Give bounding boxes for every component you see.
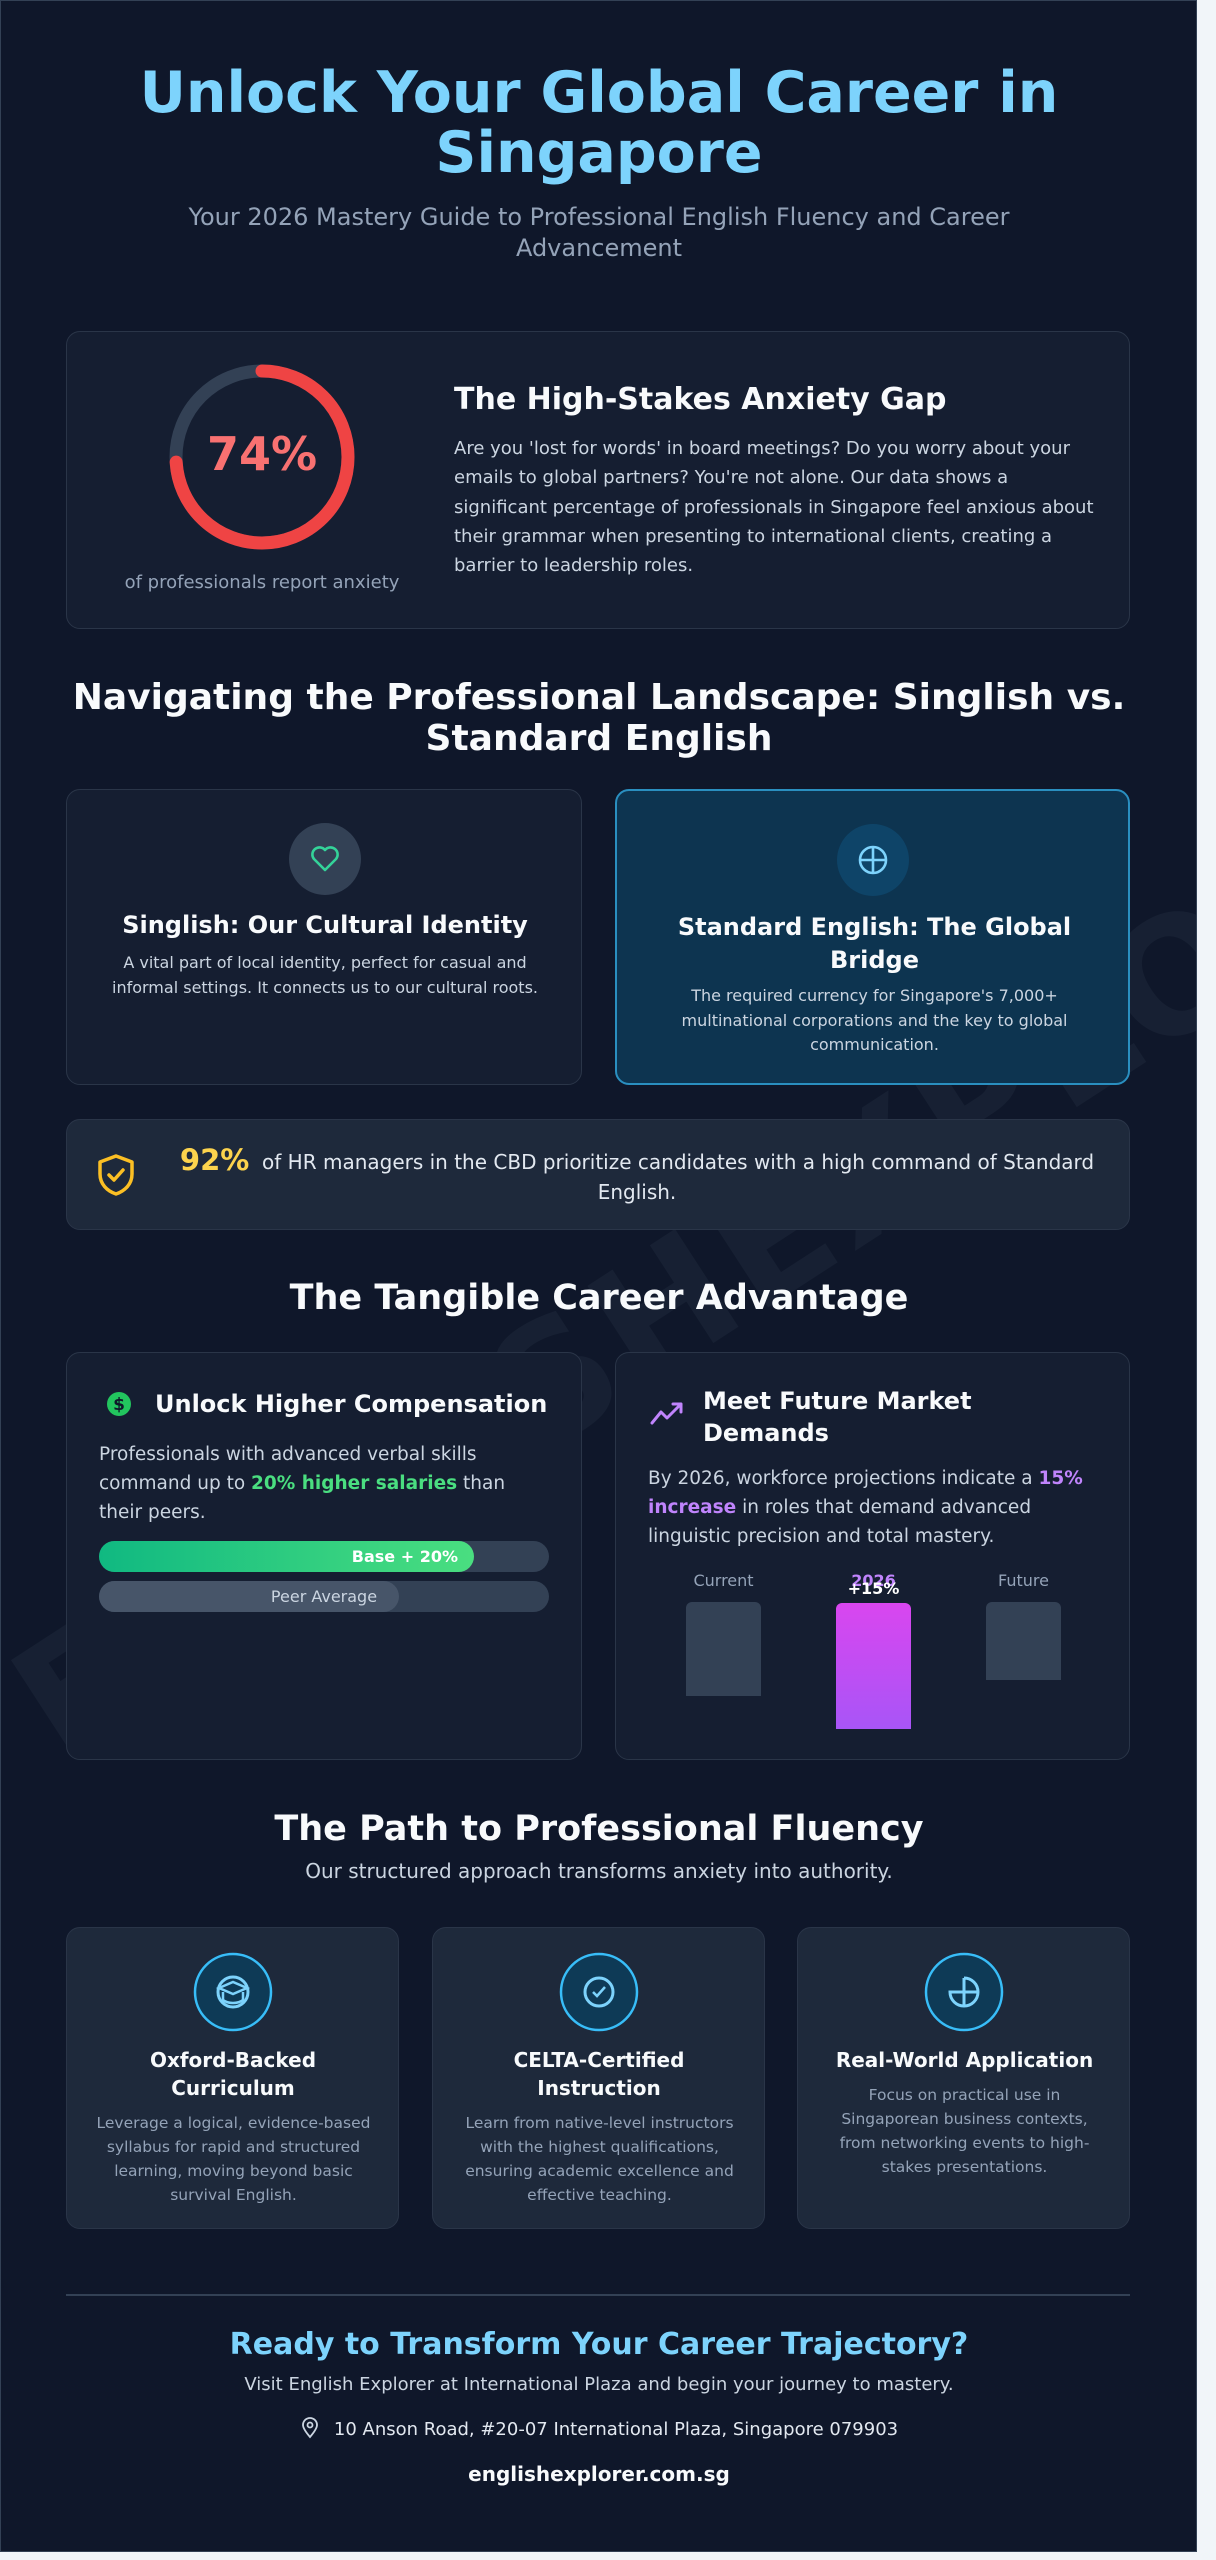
address: 10 Anson Road, #20-07 International Plaza, Singapore 079903 — [334, 2419, 898, 2440]
icon: badge — [560, 1952, 638, 2032]
panel: Singlish — [66, 789, 582, 1085]
heading: Oxford-Backed Curriculum — [150, 2048, 316, 2100]
donut chart 74% — [170, 364, 354, 550]
text: A vital part of local identity, perfect for casual and informal settings. It connects us to our cultural roots. — [112, 953, 538, 997]
panel: CELTA — [432, 1927, 765, 2229]
heading: Unlock Higher Compensation — [155, 1390, 547, 1418]
panel: market demands — [615, 1352, 1130, 1760]
heading: The High-Stakes Anxiety Gap — [454, 382, 947, 417]
website: englishexplorer.com.sg — [468, 2462, 730, 2486]
bar chart: projections — [686, 1571, 1061, 1729]
bar chart: projections: +15% — [848, 1579, 899, 1598]
text: Leverage a logical, evidence-based syllabus for rapid and structured learning, moving beyond basic survival English. — [96, 2114, 370, 2204]
section heading: path: The Path to Professional Fluency — [274, 1809, 924, 1849]
bar chart: projections: Current — [693, 1571, 754, 1590]
icon: trend — [650, 1402, 683, 1425]
text: By 2026, workforce projections indicate a 15% increase in roles that demand advanced linguistic precision and total mastery. — [648, 1468, 1083, 1547]
text: The required currency for Singapore's 7,000+ multinational corporations and the key to global communication. — [682, 986, 1067, 1054]
section heading: landscape: Navigating the Professional Landscape: Singlish vs. Standard English — [73, 677, 1125, 759]
stat text: 92% of HR managers in the CBD prioritize candidates with a high command of Standard English. — [180, 1143, 1094, 1204]
text: Professionals with advanced verbal skills command up to 20% higher salaries than their peers. — [99, 1444, 505, 1523]
text: Learn from native-level instructors with the highest qualifications, ensuring academic excellence and effective teaching. — [465, 2114, 734, 2204]
heading: Real-World Application — [836, 2048, 1093, 2072]
bar chart: projections: Future — [998, 1571, 1049, 1590]
subtitle: Your 2026 Mastery Guide to Professional English Fluency and Career Advancement — [188, 203, 1010, 262]
CTA heading: Ready to Transform Your Career Trajectory? — [230, 2327, 968, 2362]
icon: dollar: $ — [113, 1395, 125, 1415]
body text: Are you 'lost for words' in board meetings? Do you worry about your emails to global partners? You're not alone. Our data shows a significant percentage of professionals in Singapore feel anxious about their grammar when presenting to international clients, creating a barrier to leadership roles. — [454, 438, 1094, 576]
section subtitle: Our structured approach transforms anxiety into authority. — [305, 1859, 893, 1883]
bar chart: projections: 2026 — [851, 1571, 896, 1590]
panel: Real-World — [797, 1927, 1130, 2229]
heading: Singlish: Our Cultural Identity — [122, 911, 528, 939]
donut chart 74%: 74% — [207, 427, 317, 481]
heading: Standard English: The Global Bridge — [678, 913, 1071, 974]
CTA text: Visit English Explorer at International Plaza and begin your journey to mastery. — [244, 2374, 954, 2395]
panel: Standard English — [615, 789, 1130, 1085]
title: Unlock Your Global Career in Singapore — [140, 60, 1058, 186]
heading: Meet Future Market Demands — [703, 1387, 972, 1447]
text: Focus on practical use in Singaporean business contexts, from networking events to high-stakes presentations. — [840, 2086, 1089, 2176]
bar chart: salary — [99, 1541, 549, 1612]
icon: heart — [289, 823, 361, 895]
bar chart: salary: Peer Average — [271, 1587, 377, 1606]
panel: compensation — [66, 1352, 582, 1760]
donut caption: of professionals report anxiety — [125, 572, 399, 593]
panel: Oxford — [66, 1927, 399, 2229]
icon: dollar — [107, 1392, 131, 1416]
icon: shield — [98, 1154, 134, 1196]
section heading: advantage: The Tangible Career Advantage — [290, 1278, 908, 1318]
icon: pie — [924, 1952, 1004, 2032]
bar chart: salary: Base + 20% — [352, 1547, 458, 1566]
callout: 92% HR — [66, 1119, 1130, 1230]
icon: curriculum — [194, 1952, 272, 2032]
panel: anxiety gap — [66, 331, 1130, 629]
heading: CELTA-Certified Instruction — [514, 2048, 684, 2100]
icon: globe — [837, 824, 909, 896]
